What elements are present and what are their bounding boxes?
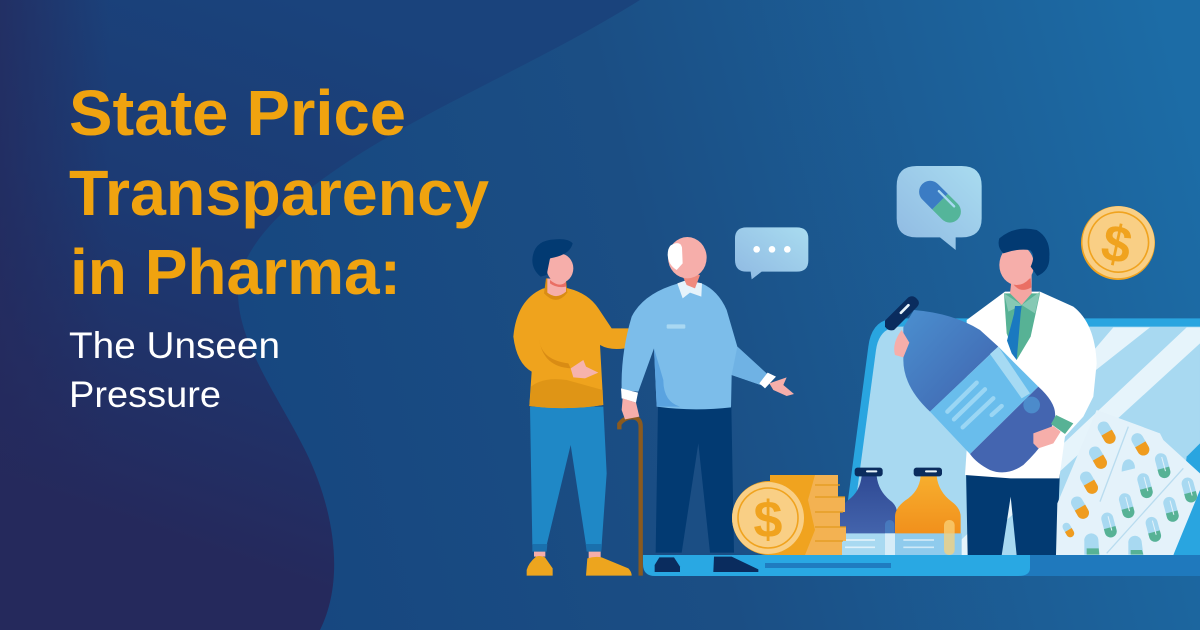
head and hair: [1010, 275, 1032, 305]
people: [513, 227, 808, 576]
laptop base: [643, 555, 1200, 576]
trousers: [966, 470, 1060, 555]
hand on bottle base: [1033, 426, 1061, 448]
laptop and pharmacist scene: [839, 229, 1200, 560]
speech bubble: capsule: [897, 166, 982, 250]
face: [547, 254, 573, 283]
hand on bottle neck: [894, 330, 909, 357]
trousers: [656, 407, 734, 553]
sweater: [622, 283, 768, 409]
blister packs: [1056, 410, 1200, 555]
hand: [571, 360, 598, 378]
neck: [544, 278, 567, 300]
sweater: [513, 287, 629, 408]
purple bottle: [840, 476, 897, 555]
coin: floating: [1067, 192, 1169, 294]
lab coat: [965, 292, 1097, 478]
old man: [619, 237, 794, 576]
trousers: [530, 407, 607, 545]
coin: foreground: $: [754, 491, 783, 549]
coin: foreground: [732, 481, 806, 555]
shoes: [527, 556, 553, 576]
pharmacist: [965, 229, 1097, 555]
collar: [677, 280, 702, 298]
coin: floating: $: [1096, 213, 1137, 276]
hair: [532, 239, 573, 277]
orange bottle: [895, 476, 961, 555]
title: in Pharma:: [70, 236, 401, 308]
subtitle: [69, 325, 280, 415]
neck and head: [681, 272, 700, 288]
title: Transparency: [69, 157, 489, 229]
cane: [619, 417, 641, 576]
laptop screen: [840, 318, 1200, 560]
cuffs and hands: [621, 388, 638, 403]
large bottle: [885, 296, 1073, 472]
title: [69, 77, 489, 308]
coin stack: [770, 475, 846, 555]
subtitle: Pressure: [69, 374, 221, 415]
ankles: [534, 552, 601, 558]
small bottles: [839, 468, 962, 555]
title: State Price: [69, 77, 406, 149]
subtitle: The Unseen: [69, 325, 280, 366]
shirt and tie: [1004, 293, 1040, 360]
speech bubble: dots: [735, 227, 808, 279]
shoes: [655, 557, 680, 572]
young man: [513, 239, 632, 576]
background blob: [0, 0, 640, 630]
